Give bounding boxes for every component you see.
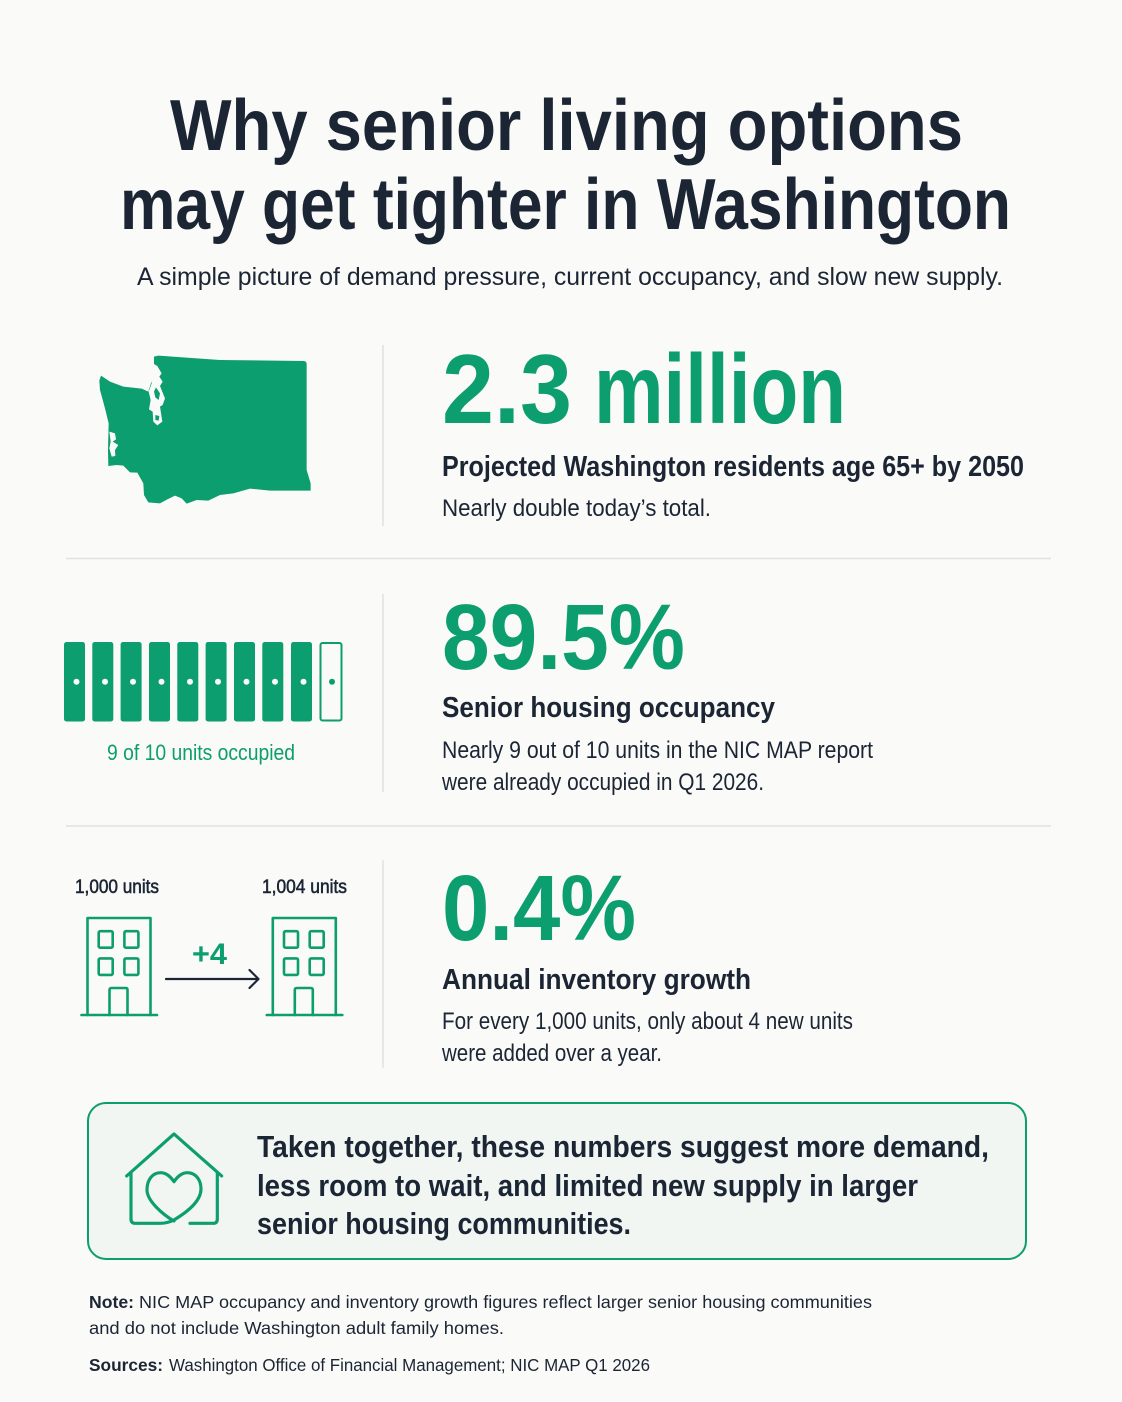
label: plus four: +4 bbox=[192, 938, 227, 971]
text: inventory description: For every 1,000 units, only about 4 new units bbox=[442, 1008, 853, 1035]
title: may get tighter in Washington bbox=[120, 165, 1011, 245]
callout text: less room to wait, and limited new supply in larger bbox=[257, 1168, 918, 1203]
callout text bbox=[257, 1129, 989, 1241]
stat: 2.3 million: million bbox=[594, 334, 846, 444]
note: Note: bbox=[89, 1292, 134, 1312]
stat: 2.3 million bbox=[442, 334, 846, 444]
note: and do not include Washington adult family homes. bbox=[89, 1318, 504, 1338]
subtitle: A simple picture of demand pressure, current occupancy, and slow new supply. bbox=[137, 263, 1003, 291]
text: inventory description bbox=[441, 1008, 853, 1067]
arrow bbox=[166, 970, 258, 988]
callout text: senior housing communities. bbox=[257, 1206, 631, 1241]
sources: Washington Office of Financial Management; NIC MAP Q1 2026 bbox=[169, 1355, 650, 1375]
icon: building right bbox=[267, 918, 342, 1015]
icon: Washington state map bbox=[99, 356, 311, 504]
heading: projected residents: Projected Washington residents age 65+ by 2050 bbox=[442, 451, 1024, 483]
title bbox=[120, 86, 1011, 245]
label: 1,000 units: 1,000 units bbox=[75, 877, 159, 898]
stat: 0.4%: 0.4% bbox=[442, 856, 636, 960]
stat: 89.5%: 89.5% bbox=[442, 585, 685, 689]
caption: units occupied: 9 of 10 units occupied bbox=[107, 740, 295, 765]
text: occupancy description: Nearly 9 out of 10 units in the NIC MAP report bbox=[442, 737, 873, 764]
callout text: Taken together, these numbers suggest more demand, bbox=[257, 1129, 989, 1164]
icon: ten unit bars bbox=[64, 642, 342, 722]
sources: Sources: bbox=[89, 1355, 163, 1375]
heading: senior housing occupancy: Senior housing occupancy bbox=[442, 692, 775, 724]
heading: annual inventory growth: Annual inventory growth bbox=[442, 964, 751, 996]
note: NIC MAP occupancy and inventory growth figures reflect larger senior housing communities bbox=[139, 1292, 872, 1312]
text: nearly double: Nearly double today’s total. bbox=[442, 495, 711, 522]
text: inventory description: were added over a year. bbox=[441, 1040, 662, 1067]
panel: callout bbox=[88, 1103, 1026, 1259]
title: Why senior living options bbox=[170, 86, 963, 166]
stat: 2.3 million: 2.3 bbox=[442, 334, 572, 444]
text: occupancy description: were already occupied in Q1 2026. bbox=[441, 769, 764, 796]
icon: house with heart bbox=[127, 1134, 222, 1223]
label: 1,004 units: 1,004 units bbox=[262, 877, 347, 898]
text: occupancy description bbox=[441, 737, 873, 796]
note bbox=[89, 1292, 872, 1338]
icon: building left bbox=[82, 918, 157, 1015]
